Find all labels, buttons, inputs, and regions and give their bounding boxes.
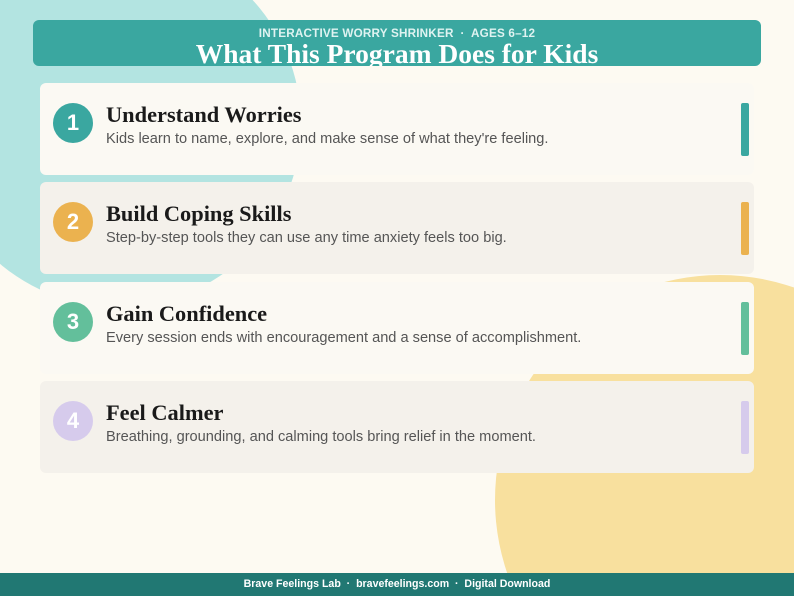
footer: Brave Feelings Lab · bravefeelings.com · Digital Download xyxy=(244,578,550,590)
number 1: 1 xyxy=(67,110,79,135)
number 4: 4 xyxy=(67,408,79,433)
number 1 xyxy=(53,103,93,143)
card 4 xyxy=(40,381,754,473)
heading 4: Feel Calmer xyxy=(106,400,224,425)
accent bar 1 xyxy=(741,103,749,156)
number 3: 3 xyxy=(67,309,79,334)
heading 2: Build Coping Skills xyxy=(106,201,291,226)
text 4: Breathing, grounding, and calming tools bring relief in the moment. xyxy=(106,429,536,445)
accent bar 2 xyxy=(741,202,749,255)
card 1 xyxy=(40,83,754,175)
text 2: Step-by-step tools they can use any time anxiety feels too big. xyxy=(106,230,507,246)
number 3 xyxy=(53,302,93,342)
text 1: Kids learn to name, explore, and make sense of what they're feeling. xyxy=(106,131,548,147)
footer xyxy=(0,573,794,596)
card 2 xyxy=(40,182,754,274)
subtitle: INTERACTIVE WORRY SHRINKER · AGES 6–12 xyxy=(259,27,535,40)
text 3: Every session ends with encouragement and a sense of accomplishment. xyxy=(106,330,581,346)
accent bar 3 xyxy=(741,302,749,355)
heading 1: Understand Worries xyxy=(106,102,302,127)
accent bar 4 xyxy=(741,401,749,454)
number 4 xyxy=(53,401,93,441)
header banner xyxy=(33,20,761,66)
heading 3: Gain Confidence xyxy=(106,301,267,326)
number 2: 2 xyxy=(67,209,79,234)
number 2 xyxy=(53,202,93,242)
card 3 xyxy=(40,282,754,374)
